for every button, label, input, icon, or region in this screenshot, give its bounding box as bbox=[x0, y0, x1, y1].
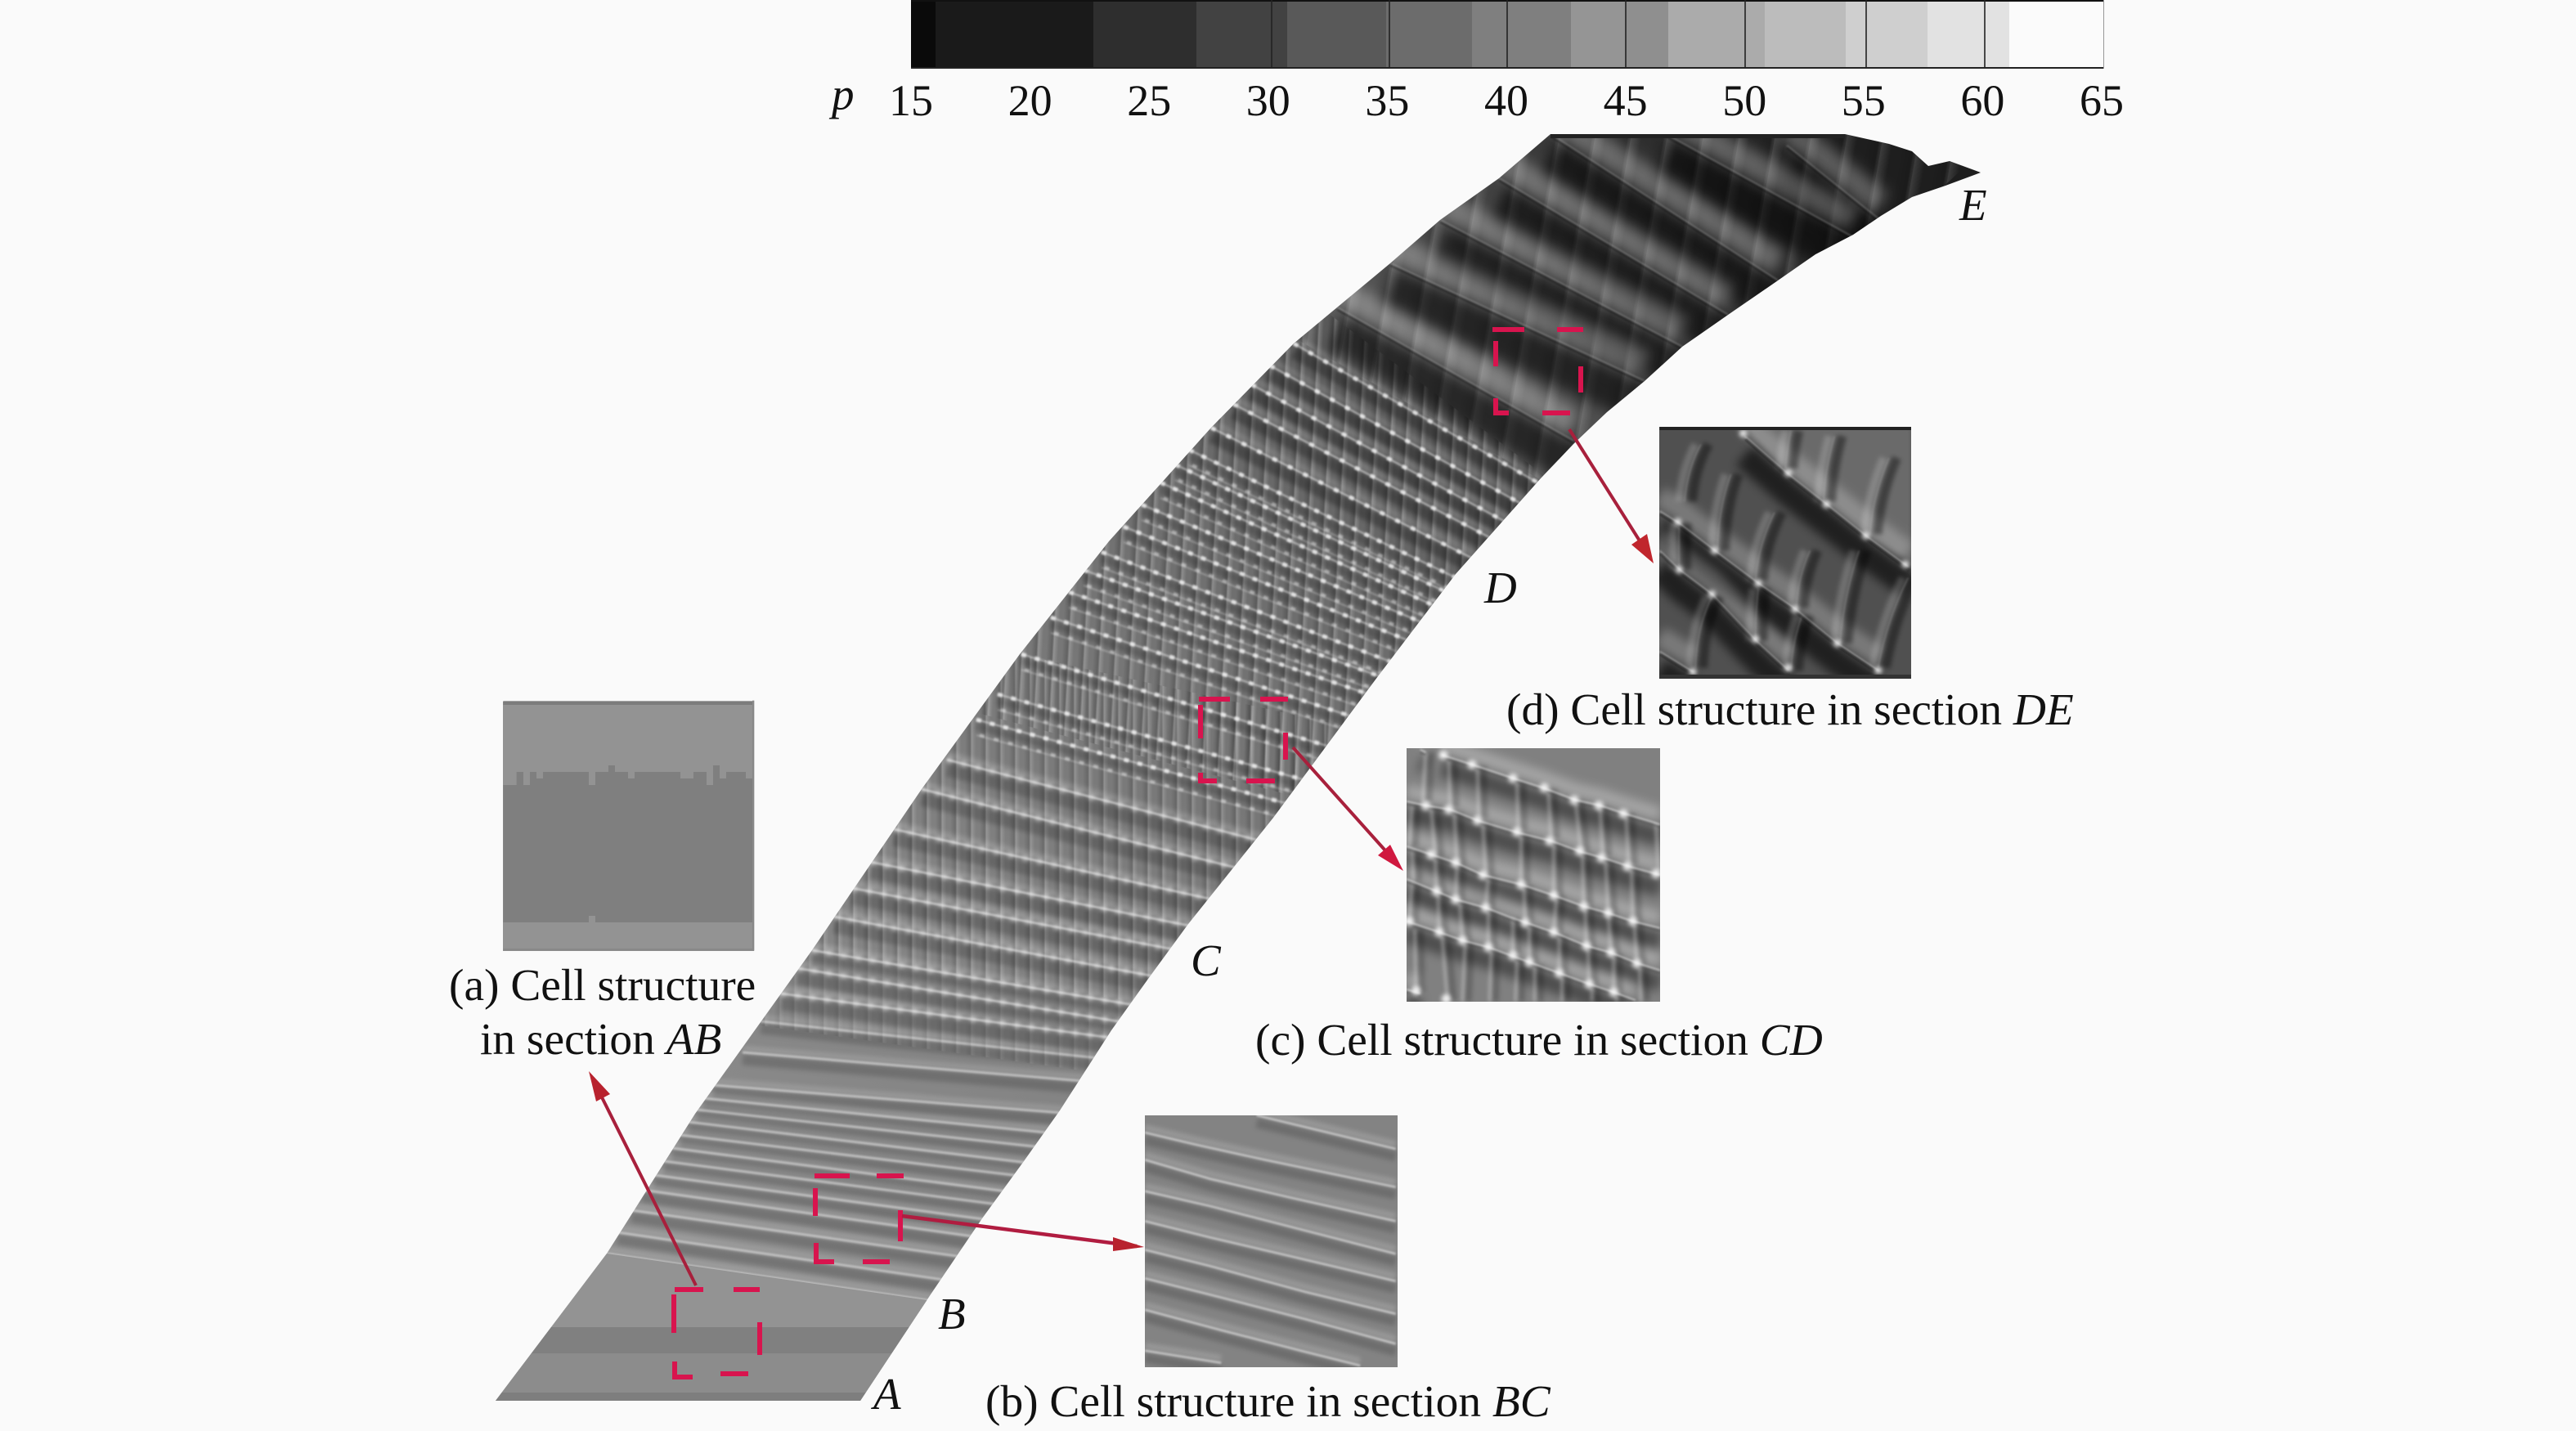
colour bar variable p: p bbox=[828, 70, 854, 119]
colour bar tick labels: 50 bbox=[1722, 76, 1766, 125]
section CD upper rows bbox=[975, 337, 1543, 817]
inset d: section DE bbox=[1659, 421, 1916, 691]
caption b: (b) Cell structure in section BC bbox=[985, 1376, 1551, 1426]
section CD lower cell walls bbox=[819, 656, 1341, 1001]
colour bar swatches bbox=[911, 0, 2104, 69]
detonation cell ribbon bbox=[474, 116, 2012, 1431]
colour bar tick labels: 65 bbox=[2080, 76, 2124, 125]
caption a: in section AB bbox=[480, 1014, 721, 1064]
inset a: section AB bbox=[503, 701, 754, 951]
colour bar tick labels: 55 bbox=[1842, 76, 1886, 125]
marker box: section CD bbox=[1199, 699, 1288, 781]
colour bar tick labels: 25 bbox=[1127, 76, 1171, 125]
dashed region markers bbox=[674, 330, 1583, 1377]
marker box: section BC bbox=[815, 1176, 904, 1262]
colour bar tick labels: 30 bbox=[1246, 76, 1290, 125]
colour bar tick labels: 40 bbox=[1484, 76, 1528, 125]
inset c: section CD bbox=[1407, 739, 1665, 1013]
caption a bbox=[449, 960, 756, 1064]
section CD upper cell walls bbox=[983, 316, 1543, 795]
point label B: B bbox=[938, 1289, 966, 1339]
colour bar tick labels: 35 bbox=[1365, 76, 1409, 125]
section CD lower rows bbox=[781, 755, 1307, 1052]
inset b: section BC bbox=[1145, 1110, 1398, 1373]
colour bar tick labels: 60 bbox=[1960, 76, 2004, 125]
ribbon top edge bbox=[1551, 134, 1845, 138]
arrow: box to inset d bbox=[1569, 429, 1654, 563]
point label E: E bbox=[1959, 180, 1987, 230]
point label A: A bbox=[870, 1369, 901, 1419]
section AB horizontal bands bbox=[496, 1254, 927, 1401]
caption c: (c) Cell structure in section CD bbox=[1255, 1015, 1823, 1065]
point label D: D bbox=[1483, 563, 1517, 612]
colour bar legend bbox=[828, 0, 2124, 125]
arrow: box to inset b bbox=[902, 1216, 1144, 1251]
arrow: box to inset c bbox=[1293, 747, 1403, 871]
colour bar tick labels: 15 bbox=[889, 76, 933, 125]
caption a: (a) Cell structure bbox=[449, 960, 756, 1010]
colour bar tick labels bbox=[889, 76, 2124, 125]
arrow: box to inset a bbox=[589, 1071, 696, 1285]
marker box: section AB bbox=[674, 1290, 760, 1377]
faint cell walls entering section CD bbox=[762, 953, 1119, 1070]
section BC streaks bbox=[607, 1017, 1120, 1313]
colour bar tick labels: 20 bbox=[1008, 76, 1052, 125]
point label C: C bbox=[1191, 935, 1222, 985]
section DE large cells bbox=[1300, 134, 1958, 479]
marker box: section DE bbox=[1492, 330, 1583, 413]
colour bar tick labels: 45 bbox=[1604, 76, 1648, 125]
caption d: (d) Cell structure in section DE bbox=[1506, 684, 2074, 734]
